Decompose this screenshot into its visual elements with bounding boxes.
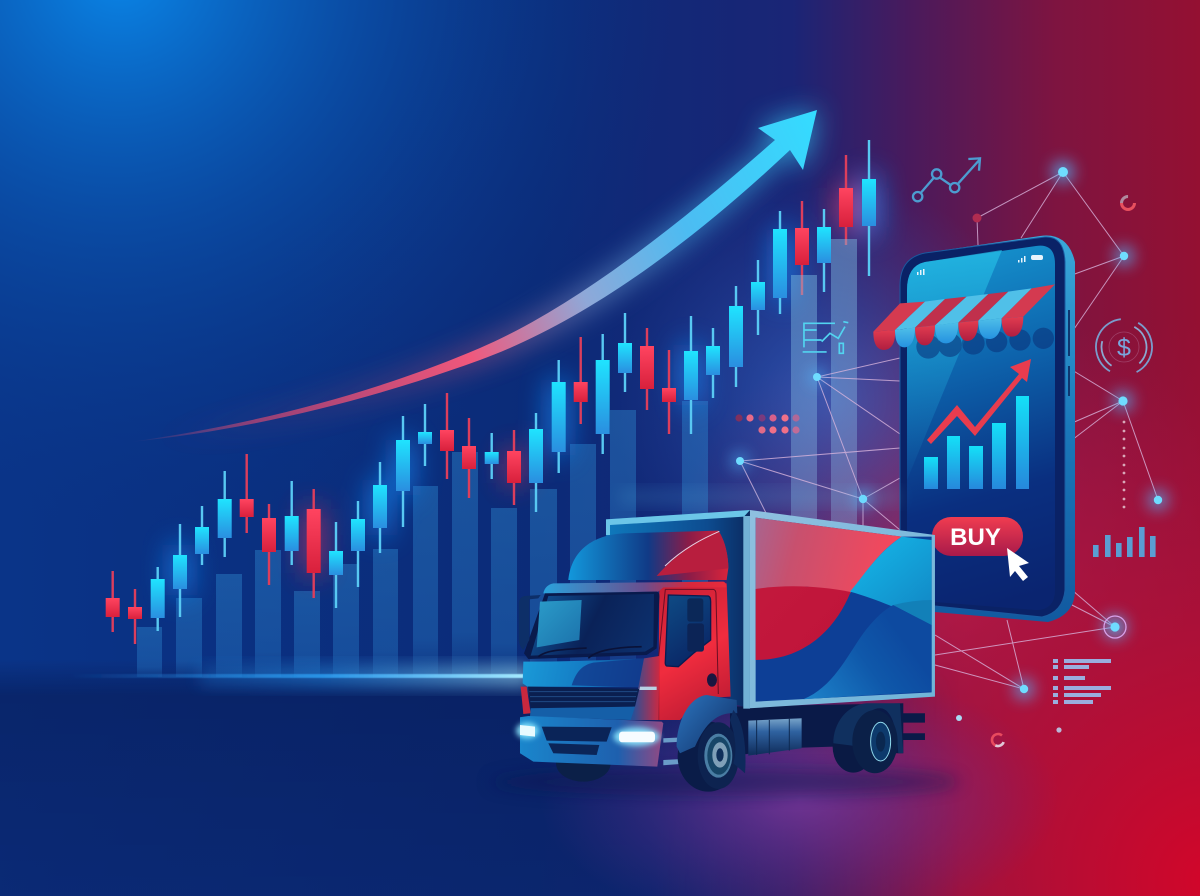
- front fender: [677, 695, 737, 753]
- BUY button: [932, 517, 1023, 556]
- screen reflection: [907, 250, 1002, 480]
- corner light strip: [639, 687, 657, 690]
- front wheel: [678, 722, 739, 792]
- red deflector: [657, 531, 728, 576]
- rising trend arrow: [130, 110, 817, 442]
- phone body: [900, 236, 1075, 622]
- icon: text list: [1053, 659, 1111, 704]
- phone screen: [907, 246, 1055, 610]
- bumper: [520, 716, 663, 767]
- blue bodies: [151, 179, 876, 618]
- cab side red: [658, 583, 731, 720]
- icon: small bar chart: [1093, 527, 1156, 557]
- BUY button: BUY: [950, 524, 1001, 551]
- icon: crescent bottom: [990, 732, 1006, 748]
- glowing network nodes: [733, 162, 1167, 733]
- cargo side frame: [750, 510, 935, 708]
- red bodies: [106, 188, 853, 619]
- phone bezel: [900, 237, 1065, 617]
- network lines: [740, 172, 1158, 689]
- cab roof fairing: [568, 531, 728, 580]
- cargo top strip: [606, 510, 750, 535]
- headlights: [520, 725, 535, 737]
- top light over truck roof: [620, 490, 900, 504]
- phone bar chart: [924, 396, 1029, 489]
- headlight glow: [516, 723, 660, 746]
- side window: [665, 595, 711, 667]
- icon: dollar coin with rings: $: [1117, 334, 1131, 362]
- front upper panel: [523, 658, 644, 687]
- blue wicks: [158, 140, 869, 631]
- step bars: [663, 737, 690, 765]
- left mirror: [519, 595, 541, 650]
- door outline: [665, 589, 718, 694]
- windshield: [524, 592, 659, 659]
- cab top strip: [543, 582, 727, 593]
- side buttons: [1068, 310, 1070, 396]
- red wicks: [113, 155, 846, 644]
- rear wheels: [833, 703, 903, 773]
- windshield reflection: [537, 600, 582, 647]
- livery panel: [756, 518, 932, 702]
- awning shadow: [916, 328, 1054, 359]
- front-left tyre: [556, 745, 611, 782]
- cargo box front: [606, 510, 750, 708]
- chassis: [730, 703, 925, 757]
- icon: crescent top right: [1122, 196, 1134, 210]
- cab corner panel: [630, 656, 659, 720]
- candle glow: [171, 175, 878, 595]
- lower panel: [530, 707, 635, 720]
- left marker: [521, 687, 531, 714]
- phone red arrow: [927, 359, 1031, 444]
- wipers: [538, 647, 642, 658]
- phone storefront: [873, 236, 1075, 622]
- awning: [873, 284, 1055, 350]
- fuel tank: [748, 718, 802, 756]
- grille: [528, 687, 639, 708]
- dotted vertical line: [1123, 421, 1125, 508]
- icon: dollar coin with rings: [1086, 309, 1162, 385]
- side mirror seen through window: [687, 598, 703, 622]
- door handle: [707, 673, 717, 687]
- floor light line: [70, 666, 530, 686]
- status icons: [917, 255, 1043, 275]
- cargo corner edge: [743, 516, 750, 709]
- translucent background bars: [137, 401, 708, 677]
- decorative dot grid: [735, 414, 800, 434]
- icon: trading cart: [803, 322, 848, 353]
- light translucent columns: [791, 239, 857, 677]
- cursor: [1007, 548, 1029, 581]
- delivery truck: [516, 510, 935, 792]
- candlestick chart: [106, 140, 878, 644]
- icon: line chart with arrow: [913, 158, 980, 201]
- ground shadow: [490, 768, 960, 796]
